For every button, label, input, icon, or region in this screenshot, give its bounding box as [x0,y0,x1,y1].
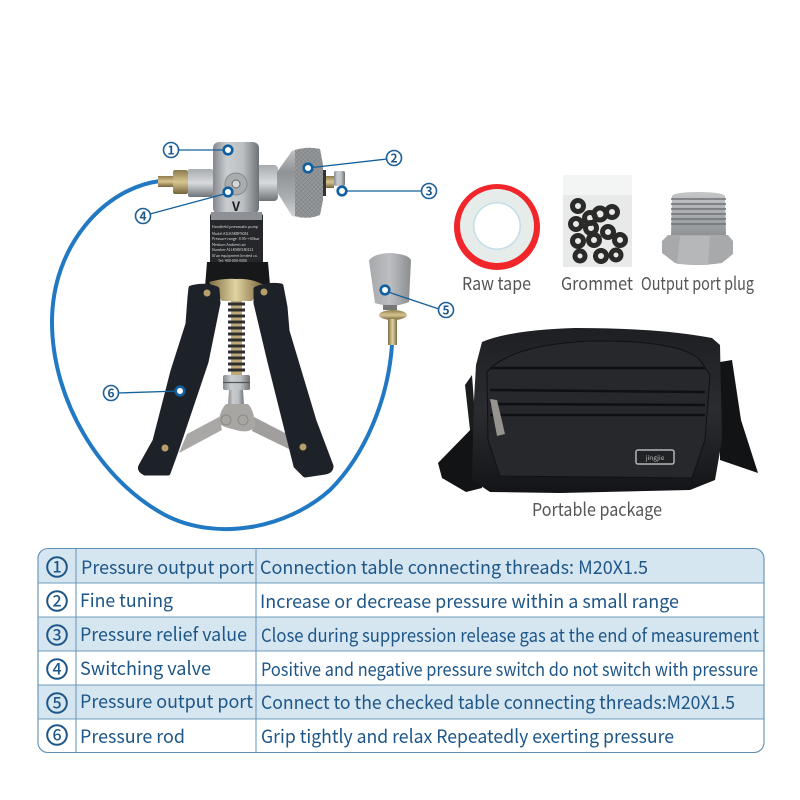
accessory: grommet bag [563,175,632,267]
nameplate collar: Number A1LK5KR180121 [212,248,254,253]
callout 4: 4 [139,208,147,224]
callout 3 [338,182,436,200]
row 6: Grip tightly and relax Repeatedly exerting pressure [261,723,674,749]
accessory: portable bag [438,328,758,493]
zip puller [490,399,505,436]
row 2: 2 [52,588,62,612]
row 3: Close during suppression release gas at the end of measurement [261,622,759,648]
accessory: raw tape [454,184,540,270]
nameplate collar: Handheld pneumatic pump [212,225,259,230]
label: output port plug: Output port plug [641,270,754,296]
row 4: 4 [52,656,62,680]
brand badge: jingjie [645,452,665,462]
label: raw tape: Raw tape [462,270,531,296]
row 5: Connect to the checked table connecting threads:M20X1.5 [261,689,735,715]
row 6 [47,722,674,749]
callout 2: 2 [390,150,398,166]
callout 6 [104,384,184,402]
callout 3: 3 [425,182,433,200]
row 4 [47,655,758,682]
nameplate collar [210,212,263,265]
table background rows [38,548,764,583]
right handle [256,285,331,475]
fine tuning knob [256,148,345,218]
zip lines [490,368,705,415]
brand badge [636,450,674,464]
callout 2 [304,150,402,172]
row 3 [47,621,759,648]
bag body [472,328,722,493]
specification table [38,548,764,752]
row 4: Switching valve [80,655,211,681]
left handle [140,286,218,473]
blue pressure hose [52,181,392,529]
row 3: 3 [52,622,62,646]
callout 1: 1 [167,142,175,158]
switching valve [225,173,247,215]
callout 4 [136,188,232,224]
row 5 [47,688,735,715]
bag front pocket [487,341,710,478]
row 6: Pressure rod [80,723,185,749]
output connector on hose [369,253,411,345]
nameplate collar: Medium Ambient air [212,243,247,248]
row 6: 6 [52,722,62,746]
row 5: 5 [52,690,62,714]
spring screw [223,298,250,406]
callouts [104,142,454,402]
callout 1 [164,142,232,158]
nameplate collar: Pressure range -0.95~+60bar [212,237,260,242]
switching valve: V [231,196,241,215]
accessory: output port plug [662,192,733,265]
callout 5: 5 [442,302,450,318]
brass block [209,279,262,301]
row 2: Fine tuning [80,587,174,613]
row 1: 1 [52,554,62,578]
label: portable package: Portable package [532,496,662,522]
black yoke [205,262,270,287]
metal scissor plate [179,404,291,453]
row 5: Pressure output port [80,688,253,714]
callout 6: 6 [107,384,115,402]
label: grommet: Grommet [561,270,633,296]
row 1: Pressure output port [81,554,254,580]
nameplate collar: Tel: 400-000-0000 [218,259,247,264]
row 1: Connection table connecting threads: M20X1.5 [260,554,648,580]
hand pump [140,142,345,475]
bag straps [438,424,482,492]
main cylinder [213,142,259,214]
row 2: Increase or decrease pressure within a small range [260,588,679,614]
left hose fitting [158,169,213,197]
row 1 [47,554,648,580]
row 2 [47,587,679,614]
nameplate collar: Model A1LK5KRP5081 [212,232,248,237]
callout 5 [381,286,454,318]
row 3: Pressure relief value [80,621,247,647]
nameplate collar: Xi'an equipment limited co. [212,254,258,259]
